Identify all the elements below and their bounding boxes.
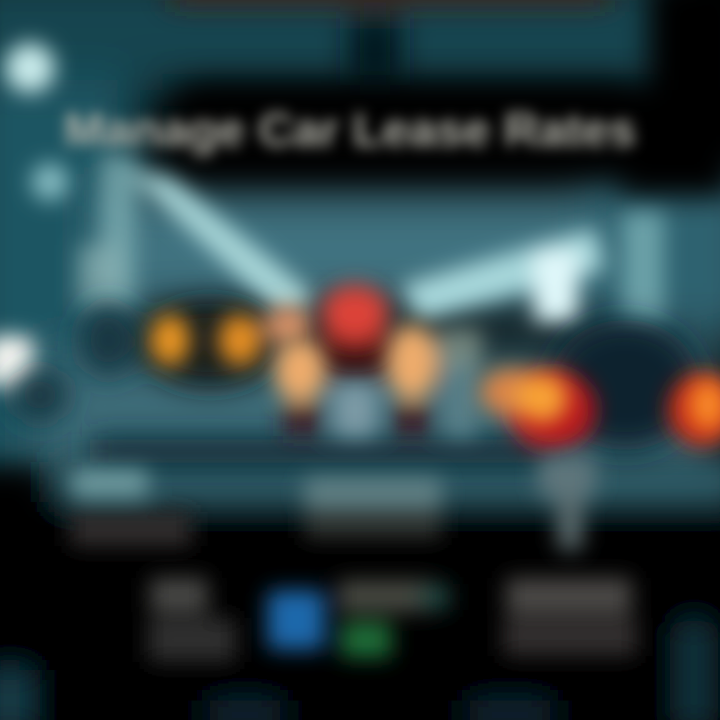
dark gauge housings: [12, 303, 700, 464]
title panel: dark band behind heading: [170, 82, 720, 195]
peach side lamps and centre column: [274, 324, 482, 437]
orange indicator lights: [150, 305, 312, 366]
bottom left grey text block: [148, 578, 236, 662]
red central dome: [309, 285, 401, 380]
bottom blue and green icon: [267, 580, 450, 658]
glowing lights at upper left: [0, 43, 69, 388]
bottom right grey text block: [503, 578, 637, 656]
lower labels row on teal strip: [70, 456, 596, 551]
title: Manage Car Lease Rates: [64, 103, 636, 156]
right glowing red-orange lights: [508, 370, 720, 450]
light beams: [78, 155, 664, 327]
central dashboard cluster: [12, 285, 720, 464]
